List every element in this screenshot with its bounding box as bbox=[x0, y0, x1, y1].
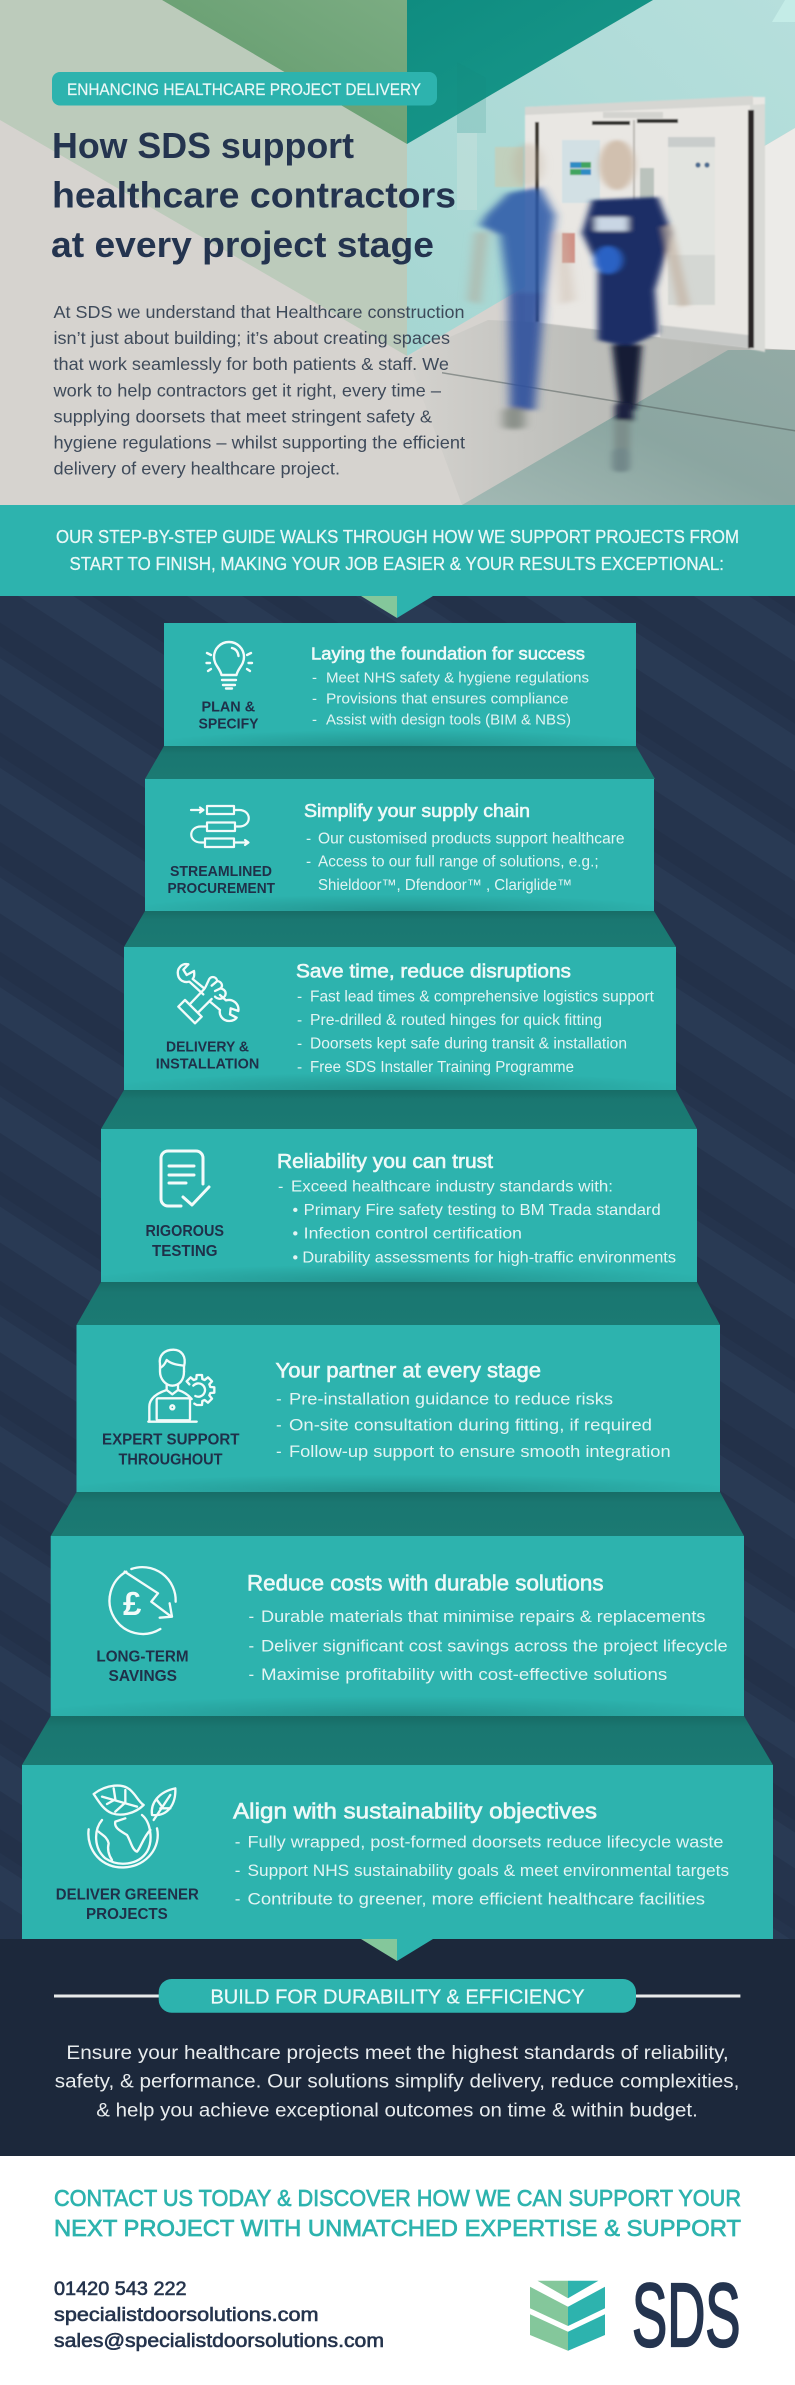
heading: save time: Save time, reduce disruptions bbox=[296, 961, 571, 983]
list: step 1 points bbox=[312, 670, 589, 728]
icon: checked document bbox=[161, 1151, 209, 1206]
intro paragraph: hygiene regulations – whilst supporting the efficient bbox=[54, 433, 465, 453]
intro band bbox=[0, 505, 795, 596]
list: step 4 points: Durability assessments for high-traffic environments bbox=[302, 1249, 676, 1266]
label: expert support throughout: EXPERT SUPPORT bbox=[102, 1432, 240, 1449]
list: step 5 points: - bbox=[276, 1442, 282, 1461]
list: step 5 points: Pre-installation guidance to reduce risks bbox=[289, 1390, 613, 1409]
list: step 3 points: Pre-drilled & routed hinges for quick fitting bbox=[310, 1012, 602, 1029]
list: step 2 points: Shieldoor™, Dfendoor™ , Clariglide™ bbox=[318, 877, 572, 894]
panel: step 7 greener projects bbox=[22, 1765, 773, 1939]
list: step 4 points: Infection control certification bbox=[304, 1226, 522, 1243]
list: step 2 points bbox=[306, 830, 625, 894]
list: step 3 points: Fast lead times & comprehensive logistics support bbox=[310, 989, 655, 1006]
list: step 6 points: - bbox=[248, 1607, 254, 1626]
panel: step 4 rigorous testing bbox=[101, 1129, 697, 1282]
list: step 1 points: - bbox=[312, 670, 317, 687]
list: step 7 points: - bbox=[235, 1833, 240, 1852]
closing paragraph: Ensure your healthcare projects meet the highest standards of reliability, bbox=[66, 2042, 729, 2064]
list: step 3 points: - bbox=[297, 989, 302, 1006]
list: step 4 points: - bbox=[278, 1179, 283, 1196]
list: step 3 points: - bbox=[297, 1059, 302, 1076]
icon: hand with wrench bbox=[178, 964, 238, 1023]
title: How SDS support bbox=[52, 125, 354, 166]
label: long-term savings bbox=[96, 1648, 189, 1685]
panel: step 6 long-term savings bbox=[51, 1536, 744, 1716]
list: step 1 points: Meet NHS safety & hygiene regulations bbox=[326, 670, 589, 687]
list: step 1 points: Provisions that ensures compliance bbox=[326, 690, 569, 707]
contact call to action: CONTACT US TODAY & DISCOVER HOW WE CAN SUPPORT YOUR bbox=[54, 2185, 741, 2211]
intro paragraph: isn’t just about building; it’s about creating spaces bbox=[54, 328, 450, 348]
list: step 2 points: Access to our full range of solutions, e.g.; bbox=[318, 854, 599, 871]
list: step 1 points: - bbox=[312, 690, 317, 707]
contact details: 01420 543 222 bbox=[54, 2279, 187, 2300]
logo: SDS shield and wordmark bbox=[530, 2266, 740, 2366]
panel: step 3 delivery and installation bbox=[124, 947, 676, 1090]
title bbox=[51, 125, 456, 265]
list: step 6 points: Deliver significant cost savings across the project lifecycle bbox=[261, 1637, 728, 1656]
contact details bbox=[54, 2279, 384, 2352]
list: step 4 points: • bbox=[292, 1226, 298, 1243]
icon: support engineer with laptop and gear bbox=[148, 1350, 214, 1422]
label: rigorous testing bbox=[146, 1223, 224, 1260]
label: streamlined procurement bbox=[168, 864, 275, 897]
icon glyph: pound sign: £ bbox=[123, 1585, 142, 1622]
list: step 6 points: Durable materials that minimise repairs & replacements bbox=[261, 1607, 705, 1626]
title: at every project stage bbox=[51, 224, 434, 265]
panel: step 2 streamlined procurement bbox=[145, 779, 654, 911]
list: step 3 points bbox=[297, 989, 655, 1076]
panel: step 1 plan and specify bbox=[164, 623, 636, 746]
intro paragraph: work to help contractors get it right, every time – bbox=[52, 380, 441, 400]
intro paragraph: At SDS we understand that Healthcare construction bbox=[54, 302, 464, 322]
label: long-term savings: SAVINGS bbox=[108, 1668, 177, 1685]
list: step 5 points: Follow-up support to ensure smooth integration bbox=[289, 1442, 671, 1461]
divider with heading pill: BUILD FOR DURABILITY & EFFICIENCY bbox=[210, 1986, 585, 2008]
list: step 4 points: Primary Fire safety testing to BM Trada standard bbox=[304, 1202, 661, 1219]
list: step 4 points bbox=[278, 1179, 676, 1266]
list: step 1 points: - bbox=[312, 711, 317, 728]
label: plan and specify: SPECIFY bbox=[198, 717, 259, 733]
list: step 7 points: Support NHS sustainability goals & meet environmental targets bbox=[248, 1861, 729, 1880]
panel: header photo background bbox=[0, 0, 795, 505]
list: step 2 points: - bbox=[306, 830, 311, 847]
arrow: step pointer bbox=[361, 1939, 433, 1961]
list: step 7 points: Fully wrapped, post-formed doorsets reduce lifecycle waste bbox=[248, 1833, 724, 1852]
list: step 5 points bbox=[276, 1390, 671, 1461]
label: rigorous testing: RIGOROUS bbox=[146, 1223, 224, 1240]
label: expert support throughout: THROUGHOUT bbox=[118, 1452, 223, 1469]
list: step 7 points: - bbox=[235, 1889, 240, 1908]
label: streamlined procurement: STREAMLINED bbox=[170, 864, 272, 880]
label: long-term savings: LONG-TERM bbox=[96, 1648, 189, 1665]
list: step 6 points: Maximise profitability with cost-effective solutions bbox=[261, 1665, 667, 1684]
heading: align with sustainability: Align with sustainability objectives bbox=[233, 1798, 597, 1823]
panel: footer background bbox=[0, 1939, 795, 2156]
list: step 7 points: - bbox=[235, 1861, 240, 1880]
intro band: START TO FINISH, MAKING YOUR JOB EASIER & YOUR RESULTS EXCEPTIONAL: bbox=[70, 554, 724, 574]
label: plan and specify: PLAN & bbox=[202, 700, 255, 716]
badge: enhancing healthcare project delivery bbox=[52, 72, 437, 106]
contact details: specialistdoorsolutions.com bbox=[54, 2305, 318, 2326]
closing paragraph bbox=[55, 2042, 739, 2121]
label: delivery and installation: DELIVERY & bbox=[166, 1040, 249, 1056]
intro paragraph bbox=[52, 302, 465, 478]
label: rigorous testing: TESTING bbox=[152, 1243, 218, 1260]
intro band: OUR STEP-BY-STEP GUIDE WALKS THROUGH HOW WE SUPPORT PROJECTS FROM bbox=[56, 527, 739, 547]
heading: reliability: Reliability you can trust bbox=[277, 1151, 493, 1173]
closing paragraph: safety, & performance. Our solutions simplify delivery, reduce complexities, bbox=[55, 2071, 739, 2093]
icon: globe with leaves bbox=[88, 1786, 175, 1867]
list: step 5 points: On-site consultation during fitting, if required bbox=[289, 1416, 652, 1435]
list: step 7 points bbox=[235, 1833, 729, 1908]
list: step 3 points: - bbox=[297, 1036, 302, 1053]
label: expert support throughout bbox=[102, 1432, 240, 1469]
list: step 3 points: - bbox=[297, 1012, 302, 1029]
list: step 4 points: • bbox=[292, 1249, 298, 1266]
label: delivery and installation bbox=[156, 1040, 259, 1072]
list: step 3 points: Doorsets kept safe during transit & installation bbox=[310, 1036, 627, 1053]
list: step 4 points: Exceed healthcare industry standards with: bbox=[291, 1179, 613, 1196]
panel: contact area background bbox=[0, 2156, 795, 2385]
icon: process flow bbox=[191, 806, 249, 847]
stepped section background bbox=[0, 596, 795, 1939]
heading: reduce costs: Reduce costs with durable solutions bbox=[247, 1571, 604, 1596]
list: step 2 points: - bbox=[306, 854, 311, 871]
list: step 3 points: Free SDS Installer Training Programme bbox=[310, 1059, 574, 1076]
list: step 5 points: - bbox=[276, 1416, 282, 1435]
contact details: sales@specialistdoorsolutions.com bbox=[54, 2331, 384, 2352]
list: step 6 points bbox=[248, 1607, 728, 1684]
list: step 7 points: Contribute to greener, more efficient healthcare facilities bbox=[248, 1889, 705, 1908]
list: step 4 points: • bbox=[292, 1202, 298, 1219]
badge: enhancing healthcare project delivery: ENHANCING HEALTHCARE PROJECT DELIVERY bbox=[67, 80, 421, 99]
label: deliver greener projects: DELIVER GREENER bbox=[56, 1887, 199, 1904]
title: healthcare contractors bbox=[52, 174, 456, 216]
heading: laying the foundation: Laying the foundation for success bbox=[311, 643, 585, 663]
divider with heading pill bbox=[54, 1979, 740, 2013]
intro paragraph: delivery of every healthcare project. bbox=[54, 458, 340, 478]
label: delivery and installation: INSTALLATION bbox=[156, 1056, 259, 1072]
heading: your partner: Your partner at every stage bbox=[276, 1360, 541, 1383]
closing paragraph: & help you achieve exceptional outcomes on time & within budget. bbox=[96, 2099, 698, 2121]
list: step 6 points: - bbox=[248, 1665, 254, 1684]
icon: falling pound bbox=[110, 1567, 176, 1634]
heading: simplify your supply chain: Simplify your supply chain bbox=[304, 800, 530, 821]
list: step 1 points: Assist with design tools (BIM & NBS) bbox=[326, 711, 571, 728]
contact call to action: NEXT PROJECT WITH UNMATCHED EXPERTISE & SUPPORT bbox=[54, 2215, 741, 2241]
list: step 2 points: Our customised products support healthcare bbox=[318, 830, 625, 847]
label: deliver greener projects bbox=[56, 1887, 199, 1923]
contact call to action bbox=[54, 2185, 741, 2241]
icon: light bulb bbox=[206, 642, 252, 688]
label: streamlined procurement: PROCUREMENT bbox=[168, 881, 275, 897]
panel: step 5 expert support bbox=[76, 1325, 720, 1492]
intro paragraph: supplying doorsets that meet stringent safety & bbox=[54, 406, 432, 426]
label: plan and specify bbox=[198, 700, 259, 733]
list: step 5 points: - bbox=[276, 1390, 282, 1409]
risers between steps bbox=[22, 746, 773, 1765]
arrow: band pointer bbox=[361, 596, 433, 618]
intro paragraph: that work seamlessly for both patients & staff. We bbox=[54, 354, 449, 374]
label: deliver greener projects: PROJECTS bbox=[86, 1906, 168, 1923]
list: step 6 points: - bbox=[248, 1637, 254, 1656]
